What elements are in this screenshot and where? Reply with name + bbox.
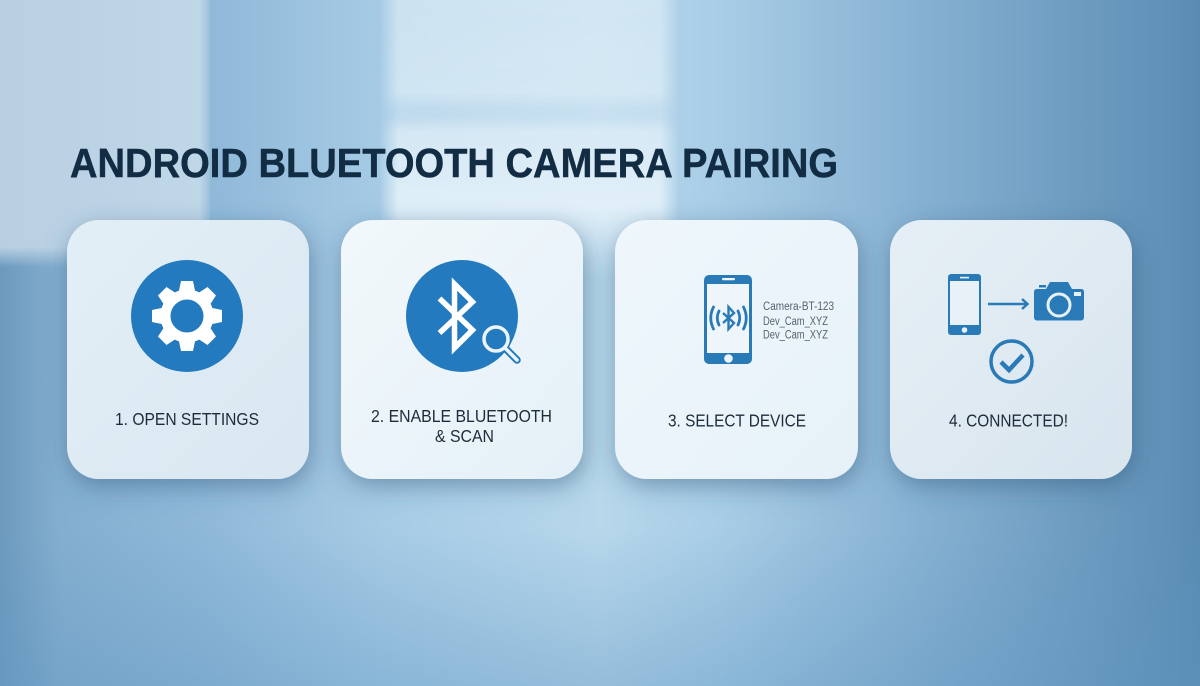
icon: camera (1034, 282, 1084, 320)
icon: bluetooth with magnifier (406, 260, 518, 372)
icon: check circle (991, 341, 1032, 382)
label: step 3: 3. SELECT DEVICE (668, 410, 806, 430)
label: step 2 (371, 406, 552, 446)
title: ANDROID BLUETOOTH CAMERA PAIRING (70, 140, 838, 186)
device list: Dev_Cam_XYZ (763, 330, 828, 342)
device list: Camera-BT-123 (763, 301, 834, 313)
label: step 2: & SCAN (435, 426, 494, 446)
label: step 4: 4. CONNECTED! (949, 410, 1068, 430)
device list: Dev_Cam_XYZ (763, 316, 828, 328)
panel: step 3 select device (615, 220, 858, 479)
arrow: phone to camera (988, 299, 1028, 309)
panel: step 4 connected (890, 220, 1132, 479)
icon: phone with bluetooth signal (704, 275, 752, 364)
panel: step 2 enable bluetooth and scan (341, 220, 583, 479)
device list (763, 301, 834, 342)
label: step 2: 2. ENABLE BLUETOOTH (371, 406, 552, 426)
icon: phone (948, 274, 981, 335)
icon: settings gear (131, 260, 243, 372)
panel: step 1 open settings (67, 220, 309, 479)
label: step 1: 1. OPEN SETTINGS (115, 409, 259, 429)
